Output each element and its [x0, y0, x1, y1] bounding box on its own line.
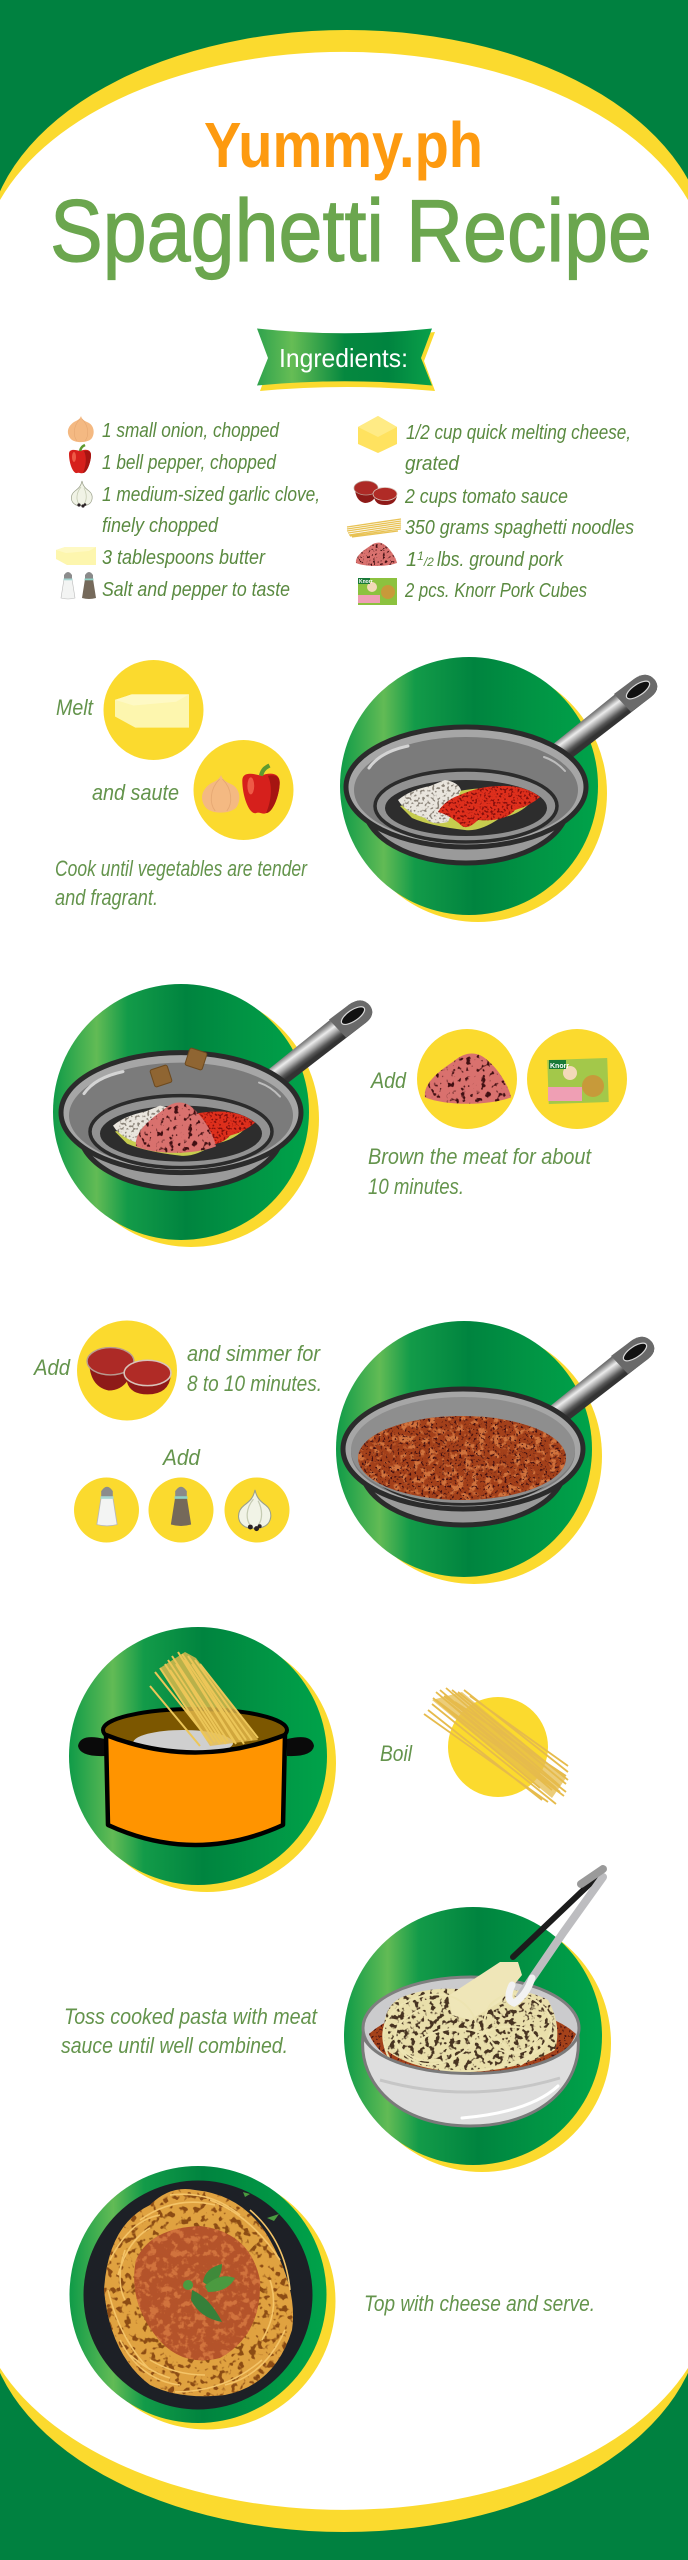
step 2: instructions	[368, 1144, 592, 1199]
step 4: spaghetti circle	[424, 1688, 568, 1804]
text: cheese continued: grated	[405, 453, 460, 475]
tongs	[509, 1869, 603, 2003]
step 1: pan illustration	[340, 657, 657, 922]
text: Knorr cubes: 2 pcs. Knorr Pork Cubes	[404, 580, 587, 602]
text: butter: 3 tablespoons butter	[102, 547, 266, 569]
step 4: pot illustration	[69, 1627, 336, 1892]
icon: butter	[56, 547, 96, 565]
step 3: pepper circle	[148, 1478, 214, 1542]
step 2: instructions: 10 minutes.	[368, 1174, 464, 1199]
text: garlic continued: finely chopped	[102, 515, 219, 537]
step 2: pan illustration with meat	[53, 984, 372, 1247]
ingredients banner	[257, 328, 435, 391]
step 3: simmer text	[187, 1341, 322, 1396]
basil leaves	[183, 2264, 235, 2322]
text: spaghetti noodles: 350 grams spaghetti noodles	[405, 517, 634, 539]
step 1: instructions: Cook until vegetables are tender	[55, 856, 308, 881]
step 3: add text: Add	[32, 1355, 71, 1380]
icon: onion	[68, 416, 94, 442]
step 5: toss text	[61, 2004, 318, 2058]
icon: Knorr box: Knorr	[359, 579, 373, 585]
text: onion: 1 small onion, chopped	[102, 420, 280, 442]
icon: salt and pepper shakers	[61, 572, 96, 599]
step 3: add seasoning text: Add	[161, 1445, 201, 1470]
meat sauce	[134, 2226, 260, 2360]
text: ground pork: /2	[423, 555, 434, 569]
step 2: Knorr circle	[527, 1029, 627, 1129]
top yellow arc	[0, 30, 688, 470]
spaghetti in pot	[150, 1652, 258, 1746]
bouillon cube	[150, 1065, 172, 1087]
pot handles	[78, 1737, 314, 1756]
step 4: boil text: Boil	[380, 1741, 413, 1766]
step 2: add text: Add	[369, 1068, 407, 1093]
step 1: saute text: and saute	[92, 780, 179, 805]
icon: spaghetti noodles	[347, 519, 401, 537]
icon: Knorr box	[358, 578, 397, 605]
text: ground pork: 1	[417, 549, 424, 563]
step 3: simmer text: and simmer for	[187, 1341, 322, 1366]
brand title: Yummy.ph	[204, 109, 483, 181]
text: salt and pepper: Salt and pepper to taste	[102, 579, 290, 601]
step 6: finished plate	[70, 2166, 336, 2430]
noodles in bowl	[383, 1962, 557, 2072]
icon: ground pork	[356, 543, 397, 566]
step 3: simmer text: 8 to 10 minutes.	[187, 1371, 322, 1396]
text: garlic: 1 medium-sized garlic clove,	[102, 484, 320, 506]
text: ground pork: 1	[406, 549, 417, 571]
bottom yellow arc	[0, 2092, 688, 2532]
step 3: salt circle	[74, 1478, 139, 1542]
step 1: vegetables circle	[194, 740, 294, 840]
step 1: instructions	[55, 856, 308, 910]
ingredient list: right column	[347, 416, 634, 605]
bowl front	[363, 2036, 578, 2126]
step 2: instructions: Brown the meat for about	[368, 1144, 592, 1169]
icon: cheese	[358, 416, 397, 453]
icon: tomato sauce	[354, 481, 397, 505]
step 1: instructions: and fragrant.	[55, 885, 158, 910]
text: ground pork: lbs. ground pork	[437, 549, 564, 571]
step 5: bowl with noodles and tongs	[344, 1869, 611, 2172]
step 2: Knorr circle: Knorr	[550, 1063, 569, 1070]
ingredient list: left column	[56, 416, 320, 601]
step 5: toss text: sauce until well combined.	[61, 2033, 288, 2058]
bouillon cube	[185, 1048, 207, 1070]
icon: garlic	[71, 481, 92, 508]
step 2: meat circle	[417, 1029, 517, 1129]
step 5: toss text: Toss cooked pasta with meat	[64, 2004, 318, 2029]
text: cheese: 1/2 cup quick melting cheese,	[406, 422, 631, 444]
icon: bell pepper	[69, 445, 91, 473]
sauce in bowl	[369, 2009, 576, 2077]
text: tomato sauce: 2 cups tomato sauce	[404, 486, 568, 508]
ingredients banner: Ingredients:	[279, 343, 408, 373]
step 1: butter circle	[104, 660, 204, 760]
step 3: pan with sauce	[336, 1321, 654, 1584]
step 6: serve text: Top with cheese and serve.	[364, 2291, 595, 2316]
text: bell pepper: 1 bell pepper, chopped	[102, 452, 277, 474]
step 1: melt text: Melt	[56, 695, 94, 720]
step 3: tomato sauce circle	[77, 1320, 177, 1420]
step 3: garlic circle	[224, 1478, 290, 1542]
